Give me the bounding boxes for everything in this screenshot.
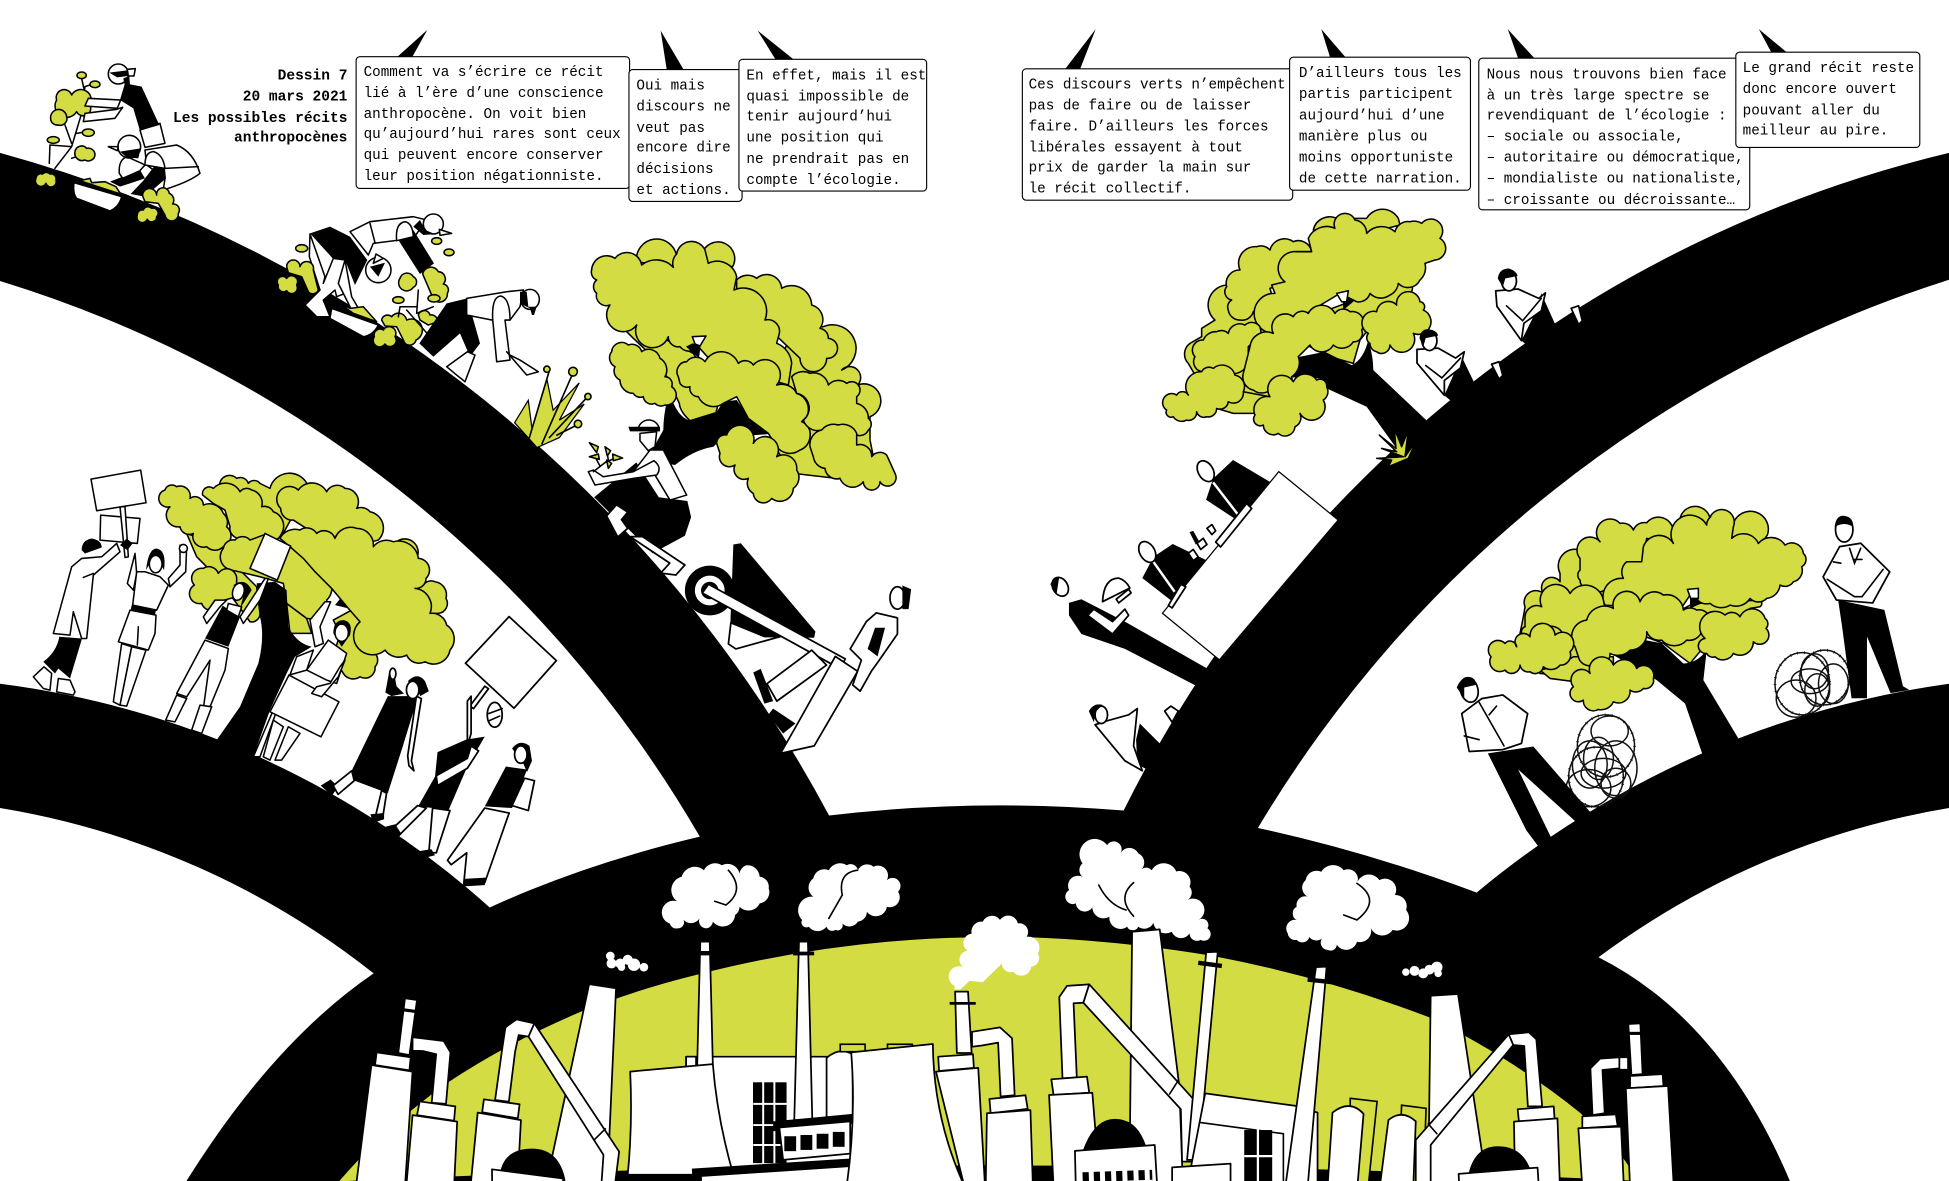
speech bubble 3: quasi impossible de bbox=[746, 90, 909, 106]
canopy back top bbox=[1680, 506, 1768, 545]
big chimney right bbox=[1428, 994, 1484, 1181]
canopy bottom low bbox=[717, 425, 799, 503]
speech bubble 3: tenir aujourd’hui bbox=[746, 110, 892, 126]
canopy back top bbox=[1313, 209, 1400, 233]
crouching gardener with shears bbox=[398, 289, 539, 382]
building C1 pipe bbox=[972, 1027, 1015, 1096]
speech bubble 1: leur position négationniste. bbox=[364, 169, 604, 185]
smoke cloud 2 bbox=[798, 863, 900, 931]
pregnant woman bbox=[385, 696, 502, 859]
branch fork notch bbox=[1687, 588, 1702, 608]
canopy back left bbox=[1520, 549, 1607, 677]
barbed wire left bbox=[1566, 715, 1637, 807]
yellow plant bbox=[1377, 428, 1417, 467]
dark ground under factories bbox=[348, 1165, 1641, 1181]
bent gardener black pants bbox=[305, 227, 367, 317]
plant with flowers bbox=[35, 72, 100, 187]
canopy mid small bbox=[220, 535, 332, 619]
reader 1 bbox=[1496, 269, 1582, 350]
tower 3 with pipe bbox=[470, 1019, 534, 1181]
speech bubble 4: libérales essayent à tout bbox=[1029, 141, 1243, 157]
canopy mid upper bbox=[202, 483, 284, 545]
man with wheelbarrow bbox=[685, 543, 911, 753]
yellow seedlings bbox=[277, 238, 454, 347]
canopy lower right lobe bbox=[333, 610, 385, 679]
canopy bottom left bbox=[1488, 623, 1574, 674]
table top bbox=[1162, 472, 1338, 660]
tableware bbox=[1168, 503, 1252, 608]
big diamond sign bbox=[465, 617, 556, 709]
big chimney centre right bbox=[1129, 929, 1183, 1181]
domed building centre bbox=[1075, 1119, 1157, 1181]
tower R3 with chimney bbox=[1626, 1023, 1674, 1181]
tree left bbox=[159, 473, 454, 757]
tower R2 with pipe bbox=[1578, 1057, 1628, 1181]
speech bubble 2 bbox=[629, 31, 742, 201]
canopy back mass bbox=[1185, 285, 1293, 413]
upside down head bbox=[366, 254, 391, 283]
trunk bbox=[647, 393, 770, 465]
waiter bbox=[1049, 574, 1212, 687]
curved pipe bbox=[413, 1037, 450, 1104]
branch fork notch bbox=[686, 336, 706, 358]
speech bubble 7: donc encore ouvert bbox=[1743, 82, 1897, 98]
canopy right middle bbox=[792, 372, 871, 436]
title block bbox=[173, 69, 348, 147]
branch fork notch bbox=[1337, 291, 1353, 310]
protesters traced bbox=[33, 470, 268, 733]
canopy lower left cluster bbox=[1192, 322, 1262, 386]
speech bubble 6: revendiquant de l’écologie : bbox=[1487, 108, 1727, 124]
speech bubble 6: – mondialiste ou nationaliste, bbox=[1487, 172, 1744, 188]
domed building right bbox=[1459, 1146, 1539, 1181]
factory hall bbox=[686, 1057, 858, 1175]
canopy upper left bbox=[1577, 517, 1673, 592]
trunk bbox=[1613, 638, 1738, 755]
diagonal duct centre bbox=[1083, 984, 1196, 1162]
protester with board bbox=[253, 602, 351, 760]
canopy back mass bbox=[767, 325, 887, 480]
speech bubble 2: encore dire bbox=[636, 141, 731, 157]
diners bbox=[1135, 458, 1270, 602]
gardeners, traced group bbox=[35, 64, 539, 382]
speech bubble 5: aujourd’hui d’une bbox=[1299, 108, 1445, 124]
protester black top bbox=[166, 578, 268, 733]
tree lower-right bbox=[1488, 506, 1806, 755]
canopy bottom bbox=[1254, 374, 1328, 436]
canopy right small bbox=[1698, 609, 1769, 660]
speech bubble 5: de cette narration. bbox=[1299, 172, 1462, 188]
speech bubble 3: une position qui bbox=[746, 131, 884, 147]
factories centre group bbox=[936, 929, 1426, 1181]
wheel bbox=[685, 566, 735, 615]
building C1 bbox=[936, 1054, 985, 1181]
speech bubble 5: D’ailleurs tous les bbox=[1299, 66, 1462, 82]
title block: 20 mars 2021 bbox=[243, 90, 348, 106]
thin ringed chimney bbox=[1187, 952, 1222, 1160]
canopy back bottom bbox=[1540, 657, 1613, 682]
speech bubble 5: manière plus ou bbox=[1299, 129, 1427, 145]
canopy mid left bbox=[1521, 584, 1605, 637]
bent gardener shirt bbox=[338, 214, 452, 317]
speech bubble 1: lié à l’ère d’une conscience bbox=[364, 86, 604, 102]
grass tuft bbox=[515, 366, 591, 448]
speech bubble 1: anthropocène. On voit bien bbox=[364, 107, 586, 123]
trunk bbox=[217, 582, 312, 757]
speech bubble 1: Comment va s’écrire ce récit bbox=[364, 65, 604, 81]
small machine box bbox=[773, 1114, 853, 1160]
speech bubble 1: qu’aujourd’hui rares sont ceux bbox=[364, 127, 621, 143]
tree top-left with farmer bbox=[591, 239, 896, 503]
speech bubble 7: meilleur au pire. bbox=[1743, 123, 1888, 139]
yellow dome behind factories bbox=[339, 937, 1638, 1181]
chimney 2 bbox=[696, 942, 713, 1065]
speech bubble 7 bbox=[1736, 29, 1920, 147]
seedling in hand bbox=[589, 443, 623, 472]
canopy far left bbox=[159, 485, 231, 550]
diagonal duct bbox=[529, 1023, 619, 1181]
canopy main bbox=[1254, 213, 1446, 333]
canopy centre front bbox=[1243, 305, 1364, 393]
speech bubble 2: Oui mais bbox=[636, 79, 705, 95]
speech bubble 5: moins opportuniste bbox=[1299, 151, 1453, 167]
speech bubble 4: faire. D’ailleurs les forces bbox=[1029, 120, 1269, 136]
canopy lower under trunk bbox=[287, 603, 312, 633]
farmer legs bbox=[594, 462, 691, 575]
crouching gardener bbox=[108, 135, 200, 197]
guard left bbox=[1457, 676, 1591, 848]
barrow tray bbox=[728, 543, 815, 649]
chimney 3 bbox=[793, 942, 814, 1120]
speech bubble 1 bbox=[356, 30, 630, 188]
right hall bbox=[1187, 1093, 1318, 1181]
cooling tower 2 bbox=[846, 1044, 965, 1181]
title block: Dessin 7 bbox=[278, 69, 347, 85]
canopy upper right bbox=[737, 274, 838, 372]
canopy main upper bbox=[591, 241, 792, 385]
man pulling bbox=[753, 586, 911, 753]
canopy front centre bbox=[677, 352, 810, 453]
back plate 1 bbox=[1350, 1098, 1377, 1181]
speech bubble 7: Le grand récit reste bbox=[1743, 61, 1914, 77]
planter and seedlings bbox=[74, 178, 179, 223]
farmer torso bbox=[588, 420, 687, 500]
planter bbox=[330, 308, 378, 337]
seated reader under table bbox=[1089, 704, 1178, 771]
speech bubble 5 bbox=[1290, 29, 1470, 190]
speech bubble 2: décisions bbox=[636, 162, 714, 178]
barrow handle bbox=[702, 584, 845, 669]
speech bubble 6 bbox=[1479, 29, 1750, 210]
protester with raised arms bbox=[113, 544, 187, 706]
speech bubble 6: – autoritaire ou démocratique, bbox=[1487, 151, 1744, 167]
platform bbox=[692, 1159, 850, 1181]
speech bubble 3: En effet, mais il est bbox=[746, 69, 926, 85]
reader 2 bbox=[1417, 329, 1503, 408]
smoke cloud 4 bbox=[1286, 865, 1409, 951]
speech bubble 4: pas de faire ou de laisser bbox=[1029, 98, 1251, 114]
silo behind tower bbox=[827, 1051, 853, 1119]
gardener with black top bbox=[83, 64, 165, 147]
canopy far lobes bbox=[373, 539, 447, 613]
small smoke puff right bbox=[1402, 962, 1442, 978]
canopy lower middle bbox=[1637, 600, 1762, 663]
speech bubble 2: et actions. bbox=[636, 183, 731, 199]
farmer with seedling bbox=[588, 420, 691, 575]
canopy back lobes bbox=[636, 239, 735, 268]
canopy main bbox=[280, 527, 454, 664]
notch in tree bbox=[335, 588, 353, 608]
factories right group bbox=[1416, 994, 1674, 1181]
small rectangles behind tower 2 bbox=[840, 1044, 912, 1052]
tall chimney bbox=[1285, 967, 1331, 1181]
speech bubble 2: discours ne bbox=[636, 100, 731, 116]
diagonal duct right bbox=[1416, 1034, 1513, 1181]
canopy bottom left bbox=[1163, 365, 1245, 421]
canopy centre front bbox=[1572, 591, 1710, 666]
base block bbox=[1172, 1164, 1231, 1181]
canopy lower left bbox=[189, 567, 237, 610]
woman in black dress bbox=[321, 668, 429, 823]
title block: Les possibles récits bbox=[173, 111, 347, 127]
building C3 with pipe bbox=[1049, 984, 1100, 1181]
tower R1 with pipe bbox=[1509, 1032, 1560, 1181]
title block: anthropocènes bbox=[234, 131, 347, 147]
smoke cloud 5 bbox=[949, 916, 1039, 990]
silo 1 bbox=[1328, 1106, 1364, 1181]
back plate 2 bbox=[1398, 1105, 1426, 1181]
protesters with board and dress bbox=[253, 602, 351, 760]
smoke cloud 1 bbox=[662, 863, 769, 928]
banquet table bbox=[1049, 458, 1338, 771]
canopy bottom bbox=[1570, 657, 1654, 711]
sign on tree bbox=[250, 533, 291, 580]
canopy back bottom bbox=[1217, 392, 1270, 413]
speech bubble 4: le récit collectif. bbox=[1029, 182, 1191, 198]
speech bubble 2: veut pas bbox=[636, 121, 705, 137]
smoke cloud 3 bbox=[1065, 839, 1211, 941]
tall tower with chimney bbox=[356, 998, 417, 1181]
canopy lower middle bbox=[1273, 281, 1412, 363]
speech bubble 4: prix de garder la main sur bbox=[1029, 161, 1251, 177]
small smoke puff left bbox=[606, 952, 648, 972]
speech bubble 6: Nous nous trouvons bien face bbox=[1487, 67, 1727, 83]
cooling tower 1 bbox=[628, 1064, 733, 1175]
speech bubble 3 bbox=[739, 31, 927, 191]
canopy top back bbox=[220, 473, 308, 533]
protester with signs bbox=[33, 470, 146, 695]
speech bubble 6: – sociale ou associale, bbox=[1487, 129, 1684, 145]
speech bubble 5: partis participent bbox=[1299, 87, 1453, 103]
speech bubble 4: Ces discours verts n’empêchent bbox=[1029, 77, 1286, 93]
tower 2 bbox=[406, 1101, 457, 1181]
canopy right low bbox=[810, 424, 896, 490]
domed building left bbox=[492, 1149, 566, 1181]
speech bubble 6: à un très large spectre se bbox=[1487, 88, 1709, 104]
smoke clouds bbox=[606, 839, 1442, 990]
canopy left small bbox=[610, 342, 676, 406]
canopy upper right bbox=[277, 483, 383, 550]
canopy main bbox=[1603, 510, 1806, 610]
speech bubble 6: – croissante ou décroissante… bbox=[1487, 193, 1735, 209]
ringed chimney bbox=[950, 992, 976, 1053]
canopy middle behind bbox=[623, 325, 720, 421]
student with backpack bbox=[447, 743, 534, 886]
big chimney left bbox=[546, 984, 616, 1181]
guard right bbox=[1823, 516, 1909, 698]
silo 2 bbox=[1380, 1115, 1416, 1181]
speech bubble 3: compte l’écologie. bbox=[746, 173, 901, 189]
speech bubble 7: pouvant aller du bbox=[1743, 103, 1880, 119]
trunk bbox=[1277, 340, 1435, 460]
barbed wire right bbox=[1775, 650, 1850, 717]
speech bubble 4 bbox=[1022, 29, 1293, 200]
speech bubble 1: qui peuvent encore conserver bbox=[364, 148, 604, 164]
hall window grid bbox=[753, 1082, 787, 1164]
speech bubble 3: ne prendrait pas en bbox=[746, 152, 909, 168]
canopy upper left bbox=[1225, 239, 1312, 320]
building C2 bbox=[986, 1095, 1033, 1181]
tree top-right bbox=[1163, 209, 1446, 467]
canopy right small bbox=[1362, 292, 1431, 353]
factories left group bbox=[356, 942, 965, 1181]
canopy back lower bbox=[187, 533, 260, 622]
